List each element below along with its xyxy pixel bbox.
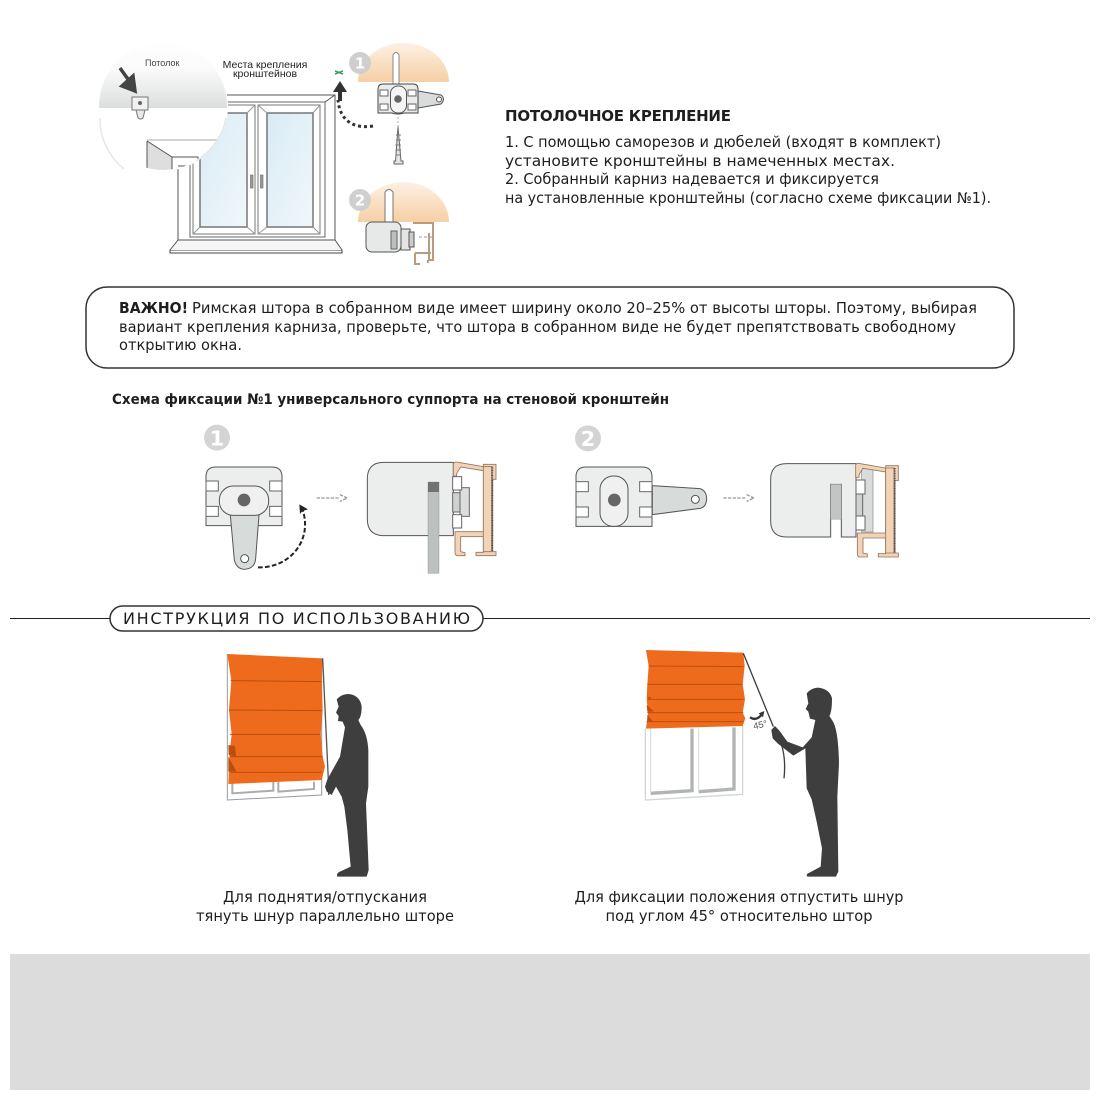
- panel: fixation step 1: [204, 425, 496, 573]
- bracket front view: [206, 467, 282, 569]
- section heading: usage instructions: [10, 606, 1090, 631]
- pull cord at angle: [743, 653, 785, 778]
- callout: important note: [86, 287, 1014, 368]
- orange blind: [227, 654, 325, 784]
- heading: ceiling mount: ПОТОЛОЧНОЕ КРЕПЛЕНИЕ: [505, 107, 731, 125]
- rotation arrow and 45 degree label: 45°: [752, 719, 768, 731]
- arrow: to assembled view: [723, 495, 754, 501]
- step 2 bracket detail: [349, 182, 449, 264]
- silhouette: [325, 694, 369, 877]
- panel: ceiling mounting diagram: [90, 36, 449, 264]
- text block: ceiling mount steps: на установленные кронштейны (согласно схеме фиксации №1).: [505, 190, 991, 207]
- heading: fixation scheme: Схема фиксации №1 универсального суппорта на стеновой кронштейн: [112, 392, 669, 408]
- grey footer band: [10, 954, 1090, 1090]
- orange blind: [646, 650, 745, 729]
- assembled bracket and rail: [367, 462, 496, 573]
- assembled bracket and rail: [771, 463, 898, 557]
- rotation arrow and 45 degree label: [750, 711, 768, 731]
- arrow: to assembled view: [317, 495, 347, 501]
- pull cord: [323, 658, 329, 795]
- step 1 bracket detail: [349, 43, 449, 164]
- bracket side view: [576, 467, 707, 526]
- text block: ceiling mount steps: [505, 134, 991, 207]
- caption: fixing position: Для фиксации положения отпустить шнур: [574, 889, 904, 906]
- label: ceiling: Потолок: [145, 58, 179, 68]
- panel: fixation step 2: [575, 425, 898, 557]
- section heading: usage instructions: ИНСТРУКЦИЯ ПО ИСПОЛЬЗОВАНИЮ: [123, 609, 470, 628]
- caption: raising and lowering: тянуть шнур параллельно шторе: [196, 908, 454, 925]
- window frame: [645, 726, 743, 800]
- badge: step 1: 1: [355, 54, 365, 72]
- caption: fixing position: под углом 45° относительно штор: [606, 908, 872, 925]
- badge: step 2: 2: [355, 192, 365, 210]
- icon: green screw marker: [335, 71, 343, 74]
- illustration: person lowering blind: [227, 654, 369, 877]
- arrow: rotate bracket: [258, 504, 308, 567]
- caption: raising and lowering: Для поднятия/отпускания: [223, 889, 427, 906]
- text block: ceiling mount steps: 2. Собранный карниз надевается и фиксируется: [505, 171, 879, 188]
- callout: important note: Римская штора в собранном виде имеет ширину около 20–25% от высоты шторы. Поэтому, выбирая: [192, 300, 977, 317]
- label: bracket locations: кронштейнов: [233, 68, 297, 80]
- aluminium rail: [856, 463, 898, 557]
- arrow: dotted from bracket to window: [333, 81, 373, 127]
- badge: step 1: [204, 425, 230, 451]
- badge: step 1: 1: [210, 426, 224, 450]
- callout: important note: вариант крепления карниза, проверьте, что штора в собранном виде не будет препятствовать свободному: [119, 319, 956, 336]
- label: bracket locations: [223, 59, 307, 80]
- text block: ceiling mount steps: 1. С помощью саморезов и дюбелей (входят в комплект): [505, 134, 941, 151]
- arrow: pointing to bracket: [120, 68, 135, 91]
- label: bracket locations: Места крепления: [223, 59, 307, 71]
- window illustration: [170, 95, 342, 253]
- badge: step 2: 2: [581, 427, 595, 451]
- text block: ceiling mount steps: установите кронштейны в намеченных местах.: [505, 153, 895, 170]
- caption: raising and lowering: [196, 889, 454, 925]
- caption: fixing position: [574, 889, 904, 925]
- badge: step 2: [575, 425, 601, 451]
- callout: important note: открытию окна.: [119, 337, 242, 354]
- silhouette: [771, 688, 839, 877]
- callout: important note: ВАЖНО!: [119, 300, 188, 317]
- window frame: [227, 654, 322, 800]
- aluminium rail: [453, 462, 496, 556]
- illustration: person fixing blind at 45 degrees: [645, 650, 839, 877]
- magnifier circle: ceiling: [99, 60, 228, 170]
